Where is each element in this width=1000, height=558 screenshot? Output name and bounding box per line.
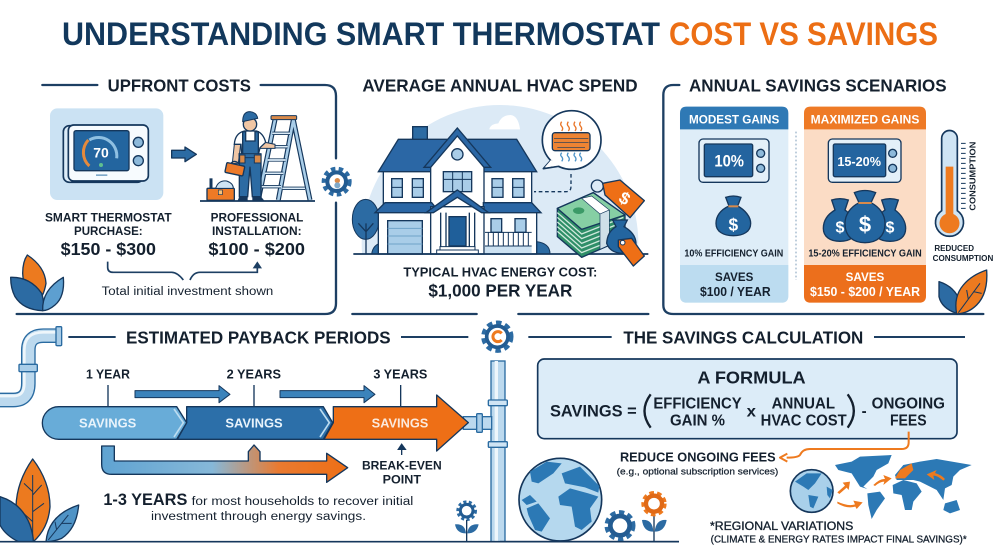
icon: leaves xyxy=(11,255,64,311)
year labels: 3 YEARS xyxy=(373,367,427,381)
icon: 10% display xyxy=(699,139,769,182)
timeline bar: SAVINGS xyxy=(372,417,428,431)
payback summary: for most households to recover initial xyxy=(192,494,413,508)
icon: right pipe xyxy=(463,361,507,542)
reduce ongoing fees note: REDUCE ONGOING FEES xyxy=(620,451,776,465)
payback summary: 1-3 YEARS xyxy=(103,490,187,509)
panel: upfront costs xyxy=(11,76,349,314)
panel: annual savings scenarios xyxy=(663,76,994,314)
thermostat purchase label xyxy=(45,211,172,259)
arrow: fees to reduce note xyxy=(780,432,909,462)
professional installation label: INSTALLATION: xyxy=(212,224,302,238)
icon: left pipe xyxy=(0,327,62,400)
card: modest gains: SAVES xyxy=(715,270,753,284)
arrow: thermostat to installer xyxy=(172,147,196,162)
payback summary xyxy=(103,490,413,523)
icon: 10% display: 10% xyxy=(714,152,744,171)
break-even point label: BREAK-EVEN xyxy=(362,458,442,472)
icon: three money bags: $ xyxy=(836,219,845,236)
icon: smart thermostat: 70 xyxy=(93,144,109,160)
icon: money bag xyxy=(716,196,751,236)
regional variations note: (CLIMATE & ENERGY RATES IMPACT FINAL SAVINGS)* xyxy=(711,534,967,545)
icon: three money bags: $ xyxy=(886,219,895,236)
formula box: - xyxy=(862,403,867,420)
card: maximized gains: 15-20% EFFICIENCY GAIN xyxy=(808,249,922,260)
formula box: SAVINGS = xyxy=(550,402,637,421)
icon: three money bags xyxy=(823,190,906,243)
icon: small globe xyxy=(790,470,833,512)
break-even point label xyxy=(362,444,442,487)
thermostat purchase label: $150 - $300 xyxy=(61,239,156,259)
break-even point label: POINT xyxy=(383,473,422,487)
panel: the savings calculation xyxy=(500,327,972,545)
icon: orange gear flower xyxy=(642,493,667,542)
reduced consumption label: REDUCED xyxy=(934,244,974,253)
icon: 15-20% display: 15-20% xyxy=(837,155,881,169)
card: maximized gains xyxy=(804,107,926,303)
icon: money stack with tags: $ xyxy=(615,187,634,209)
icon: leaves xyxy=(939,270,987,314)
formula box: A FORMULA xyxy=(697,367,806,387)
heading: payback periods: ESTIMATED PAYBACK PERIODS xyxy=(126,327,391,347)
icon: cloud xyxy=(489,115,520,129)
heading: savings calculation: THE SAVINGS CALCULATION xyxy=(623,327,863,347)
icon: gear xyxy=(607,513,633,538)
reduce ongoing fees note: (e.g., optional subscription services) xyxy=(617,466,778,476)
icon: installer with ladder xyxy=(200,112,315,201)
callout: ac unit bubble xyxy=(542,111,601,169)
title: UNDERSTANDING SMART THERMOSTAT xyxy=(62,16,660,52)
card: maximized gains: MAXIMIZED GAINS xyxy=(811,112,919,126)
return flow arrow xyxy=(102,445,348,482)
card: modest gains: MODEST GAINS xyxy=(689,112,779,126)
reduce ongoing fees note xyxy=(617,451,778,476)
timeline bar: SAVINGS xyxy=(225,417,283,431)
icon: gear flower xyxy=(455,502,479,542)
professional installation label: $100 - $200 xyxy=(208,239,305,259)
timeline bar xyxy=(42,395,468,451)
formula box: ANNUAL xyxy=(772,395,835,412)
title: COST VS SAVINGS xyxy=(669,16,938,52)
card: maximized gains: $150 - $200 / YEAR xyxy=(810,285,920,299)
sky backdrop xyxy=(362,105,638,254)
thermostat purchase label: PURCHASE: xyxy=(74,224,143,238)
icon: large globe xyxy=(519,458,602,541)
formula box: EFFICIENCY xyxy=(653,395,742,412)
payback summary: investment through energy savings. xyxy=(151,509,366,523)
formula box: GAIN % xyxy=(670,413,725,430)
dashed connector xyxy=(534,174,571,192)
icon: center gear xyxy=(484,323,511,350)
icon: 15-20% display xyxy=(828,139,901,182)
icon: smart thermostat xyxy=(50,108,163,200)
panel: estimated payback periods xyxy=(0,323,679,542)
heading: hvac spend: AVERAGE ANNUAL HVAC SPEND xyxy=(362,76,638,96)
formula box xyxy=(538,359,957,439)
regional variations note: *REGIONAL VARIATIONS xyxy=(710,519,853,533)
icon: three money bags: $ xyxy=(859,212,871,237)
icon: world map with arrows xyxy=(835,455,972,519)
card: modest gains: 10% EFFICIENCY GAIN xyxy=(684,249,783,260)
regional variations note xyxy=(710,519,967,545)
icon: money stack with tags xyxy=(557,180,644,266)
professional installation label xyxy=(208,211,305,259)
year labels: 2 YEARS xyxy=(227,367,281,381)
year labels xyxy=(86,367,427,407)
bracket arrow xyxy=(108,261,262,280)
formula box: ONGOING xyxy=(872,395,945,412)
formula box: FEES xyxy=(890,413,927,430)
icon: money bag: $ xyxy=(729,215,739,235)
formula box: HVAC COST xyxy=(761,413,847,430)
timeline bar: SAVINGS xyxy=(79,417,136,431)
arrows between years xyxy=(135,386,375,403)
hvac energy cost text xyxy=(403,265,597,301)
card: modest gains: $100 / YEAR xyxy=(700,285,771,299)
icon: thermometer xyxy=(935,130,978,236)
heading: upfront costs: UPFRONT COSTS xyxy=(108,76,251,96)
heading: savings scenarios: ANNUAL SAVINGS SCENARIOS xyxy=(689,76,947,96)
reduced consumption label xyxy=(933,244,994,263)
hvac energy cost text: TYPICAL HVAC ENERGY COST: xyxy=(403,265,597,280)
reduced consumption label: CONSUMPTION xyxy=(933,254,994,263)
icon: gear xyxy=(324,169,349,194)
professional installation label: PROFESSIONAL xyxy=(211,211,303,225)
caption: total investment: Total initial investment shown xyxy=(102,284,273,298)
year labels: 1 YEAR xyxy=(86,367,130,381)
formula box: x xyxy=(747,404,756,421)
icon: leaves xyxy=(0,459,79,542)
panel: average annual hvac spend xyxy=(352,76,648,382)
thermostat purchase label: SMART THERMOSTAT xyxy=(45,211,172,225)
hvac energy cost text: $1,000 PER YEAR xyxy=(428,281,572,301)
icon: thermometer: CONSUMPTION xyxy=(968,142,978,211)
card: maximized gains: SAVES xyxy=(846,270,884,284)
card: modest gains xyxy=(680,107,788,303)
icon: house xyxy=(352,127,648,254)
